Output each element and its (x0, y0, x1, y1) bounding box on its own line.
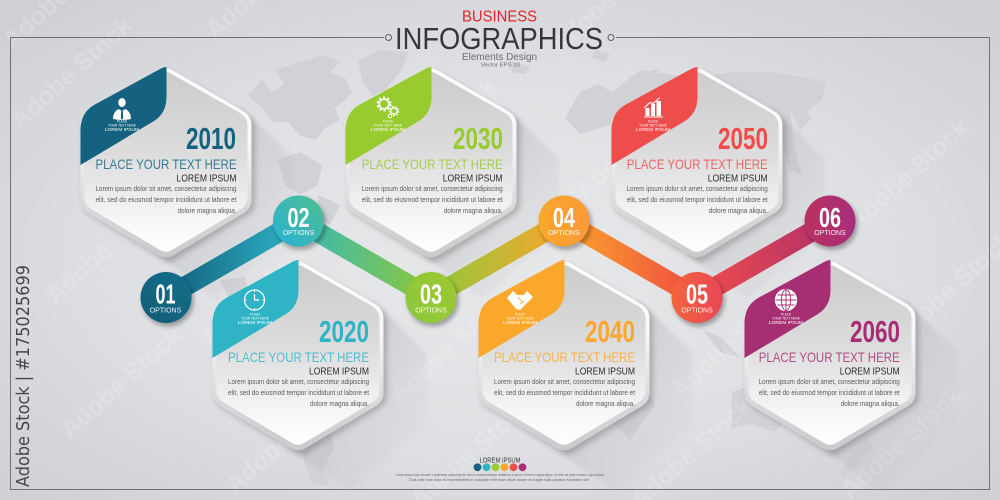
timeline node 01 (140, 272, 194, 326)
panel: 2060: LOREM IPSUM (769, 320, 803, 326)
panel: 2020 (212, 260, 426, 492)
timeline node 04: 04 (553, 202, 575, 233)
footer text (396, 473, 604, 482)
panel: 2020: PLACE YOUR TEXT HERE (228, 350, 369, 365)
watermark: Adobe Stock (195, 226, 328, 349)
icon: handshake (507, 291, 533, 310)
footer heading: LOREM IPSUM (480, 458, 521, 464)
watermark: Adobe Stock (5, 11, 138, 134)
world map backdrop (220, 50, 872, 486)
timeline ribbon (166, 221, 830, 298)
panel: 2050: Lorem ipsum dolor sit amet, consectetur adipiscing (627, 184, 768, 193)
timeline node 05: 05 (686, 278, 708, 310)
panel: 2060 (744, 260, 958, 492)
heading: infographics: INFOGRAPHICS (395, 22, 603, 56)
panel: 2010: LOREM IPSUM (176, 174, 236, 185)
watermark: Adobe Stock (370, 71, 503, 194)
panel: 2040: PLACE (515, 312, 525, 316)
panel: 2060: elit, sed do eiusmod tempor incididunt ut labore et (759, 388, 900, 397)
icon: bar chart (644, 98, 663, 118)
footer text: Duis aute irure dolor in reprehenderit in voluptate velit esse cillum dolore eu fugiat nulla pariatur excepteur sint (409, 478, 589, 482)
panel: 2040: Lorem ipsum dolor sit amet, consectetur adipiscing (494, 377, 635, 386)
timeline node 04: OPTIONS (548, 230, 580, 237)
panel: 2030: PLACE (383, 120, 393, 124)
panel: 2040: 2040 (585, 315, 635, 349)
panel: 2010: elit, sed do eiusmod tempor incididunt ut labore et (96, 195, 236, 204)
panel: 2010: PLACE YOUR TEXT HERE (96, 157, 236, 172)
panel: 2050: LOREM IPSUM (636, 127, 670, 133)
timeline node 01: OPTIONS (150, 308, 182, 314)
panel: 2020: LOREM IPSUM (238, 320, 272, 326)
panel: 2040: dolore magna aliqua. (576, 399, 635, 408)
panel: 2010: LOREM IPSUM (105, 127, 139, 133)
panel: 2030: YOUR TEXT HERE (374, 124, 402, 128)
timeline node 02 (273, 196, 326, 250)
panel: 2050: PLACE YOUR TEXT HERE (627, 157, 768, 172)
panel: 2060: PLACE (781, 312, 791, 316)
timeline node 04 (538, 196, 592, 250)
panel: 2020: elit, sed do eiusmod tempor incididunt ut labore et (228, 388, 369, 397)
panel: 2060: PLACE YOUR TEXT HERE (759, 350, 900, 365)
timeline node 05 (672, 272, 725, 326)
watermark: Adobe Stock (55, 321, 188, 444)
timeline node 03: 03 (420, 278, 442, 310)
panel: 2010: PLACE (117, 120, 127, 124)
panel: 2020: YOUR TEXT HERE (241, 316, 269, 320)
panel: 2030: dolore magna aliqua. (444, 206, 503, 215)
colour dots (474, 463, 526, 471)
panel: 2020: PLACE (250, 312, 260, 316)
timeline node 05: OPTIONS (681, 308, 713, 314)
panel: 2030: LOREM IPSUM (371, 127, 405, 133)
heading: business: BUSINESS (462, 9, 537, 26)
watermark: Adobe (40, 237, 117, 309)
timeline node 01: 01 (156, 278, 176, 310)
panel: 2060: 2060 (850, 315, 900, 349)
panel: 2020: Lorem ipsum dolor sit amet, consectetur adipiscing (228, 377, 369, 386)
icon: globe (776, 290, 796, 310)
panel: 2050: LOREM IPSUM (708, 174, 768, 185)
panel: 2050: dolore magna aliqua. (709, 206, 768, 215)
panel: 2040: LOREM IPSUM (575, 367, 635, 378)
footer legend (396, 458, 604, 482)
timeline node 03 (406, 272, 459, 326)
subheading: Elements Design (462, 52, 537, 63)
panel: 2050: PLACE (648, 120, 658, 124)
panel: 2040: PLACE YOUR TEXT HERE (494, 350, 635, 365)
panel: 2040 (478, 260, 692, 492)
watermark: Adobe Stock (842, 113, 975, 236)
panel: 2030: Lorem ipsum dolor sit amet, consectetur adipiscing (362, 184, 503, 193)
panel: 2060: dolore magna aliqua. (841, 399, 900, 408)
footer text: Lorem ipsum dolor sit amet, consectetur adipiscing elit, sed do eiusmod tempor incididunt ut labore et dolore magna aliqua. Ut enim ad minim veniam, quis nostrud (396, 473, 604, 477)
timeline node 02: 02 (288, 202, 310, 233)
panel: 2030 (346, 67, 559, 299)
panel: 2040: elit, sed do eiusmod tempor incididunt ut labore et (494, 388, 635, 397)
watermark: Adobe Stock (570, 81, 703, 204)
panel: 2030: LOREM IPSUM (443, 174, 503, 185)
timeline node 03: OPTIONS (415, 308, 447, 314)
panel: 2060: Lorem ipsum dolor sit amet, consectetur adipiscing (759, 377, 900, 386)
panel: 2020: 2020 (319, 315, 369, 349)
title (386, 9, 614, 69)
panel: 2050: elit, sed do eiusmod tempor incididunt ut labore et (627, 195, 768, 204)
watermark: Adobe Stock (220, 376, 353, 499)
timeline node 06: 06 (819, 202, 841, 233)
panel: 2030: elit, sed do eiusmod tempor incididunt ut labore et (362, 195, 503, 204)
watermark: Adobe Stock (665, 281, 798, 404)
panel: 2010 (80, 67, 294, 299)
panel: 2020: LOREM IPSUM (309, 367, 369, 378)
panel: 2040: YOUR TEXT HERE (506, 316, 534, 320)
panel: 2030: PLACE YOUR TEXT HERE (362, 157, 503, 172)
vertical stock label: Adobe Stock | #175025699 (14, 265, 34, 487)
panel: 2010: YOUR TEXT HERE (108, 124, 136, 128)
watermark: Adobe Stock (385, 286, 518, 409)
icon: businessman (113, 98, 131, 120)
timeline node 06 (804, 196, 858, 250)
panel: 2060: YOUR TEXT HERE (772, 316, 800, 320)
panel: 2010: 2010 (186, 122, 236, 156)
panel: 2050: 2050 (718, 122, 768, 156)
icon: gears (378, 98, 398, 118)
icon: clock (244, 290, 264, 310)
panel: 2010: dolore magna aliqua. (178, 206, 236, 215)
panel: 2060: LOREM IPSUM (840, 367, 900, 378)
timeline node 06: OPTIONS (814, 230, 846, 237)
timeline node 02: OPTIONS (283, 230, 315, 237)
panel: 2010: Lorem ipsum dolor sit amet, consectetur adipiscing (96, 184, 236, 193)
title ornaments (386, 34, 614, 40)
version note: Vector EPS 10 (481, 63, 520, 69)
panel: 2050 (612, 67, 825, 299)
panel: 2040: LOREM IPSUM (503, 320, 537, 326)
panel: 2050: YOUR TEXT HERE (639, 124, 667, 128)
panel: 2020: dolore magna aliqua. (310, 399, 369, 408)
panel: 2030: 2030 (453, 122, 503, 156)
